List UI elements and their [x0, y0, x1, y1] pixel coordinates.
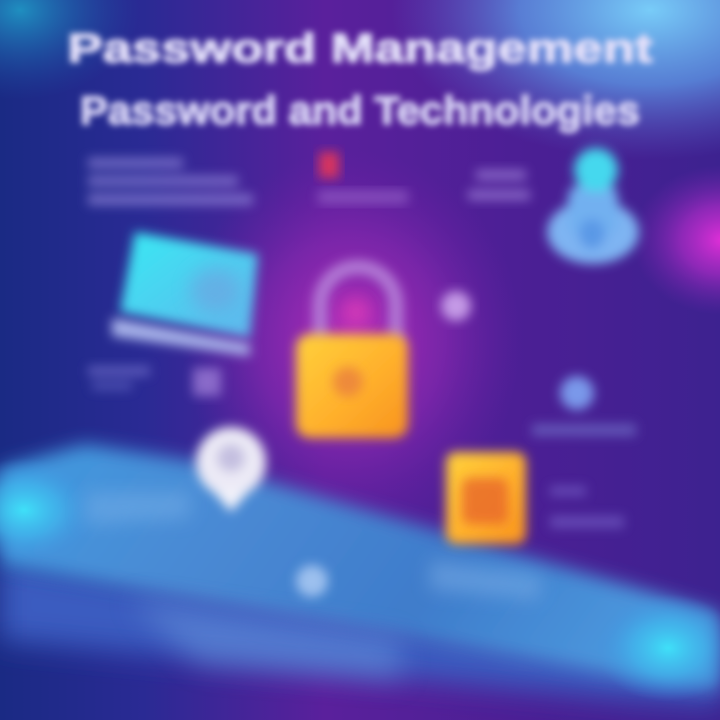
icon: floating dot — [441, 291, 471, 321]
caption: laptop — [88, 366, 221, 396]
icon: location pin — [196, 427, 266, 512]
title — [68, 25, 653, 133]
text block: top right — [468, 170, 530, 200]
icon: small blue badge with caption — [532, 376, 636, 436]
icon: laptop — [112, 232, 258, 356]
platform — [0, 444, 720, 705]
text block: top left — [88, 158, 253, 205]
icon: main padlock — [296, 267, 408, 438]
icon: red marker with caption — [318, 152, 408, 204]
icon: small orange padlock — [446, 452, 526, 544]
text block: right of small padlock — [550, 486, 624, 528]
title: Password Management — [68, 25, 653, 71]
icon: user silhouette — [547, 148, 639, 264]
icon: platform dot — [296, 565, 328, 597]
title: Password and Technologies — [80, 89, 640, 133]
